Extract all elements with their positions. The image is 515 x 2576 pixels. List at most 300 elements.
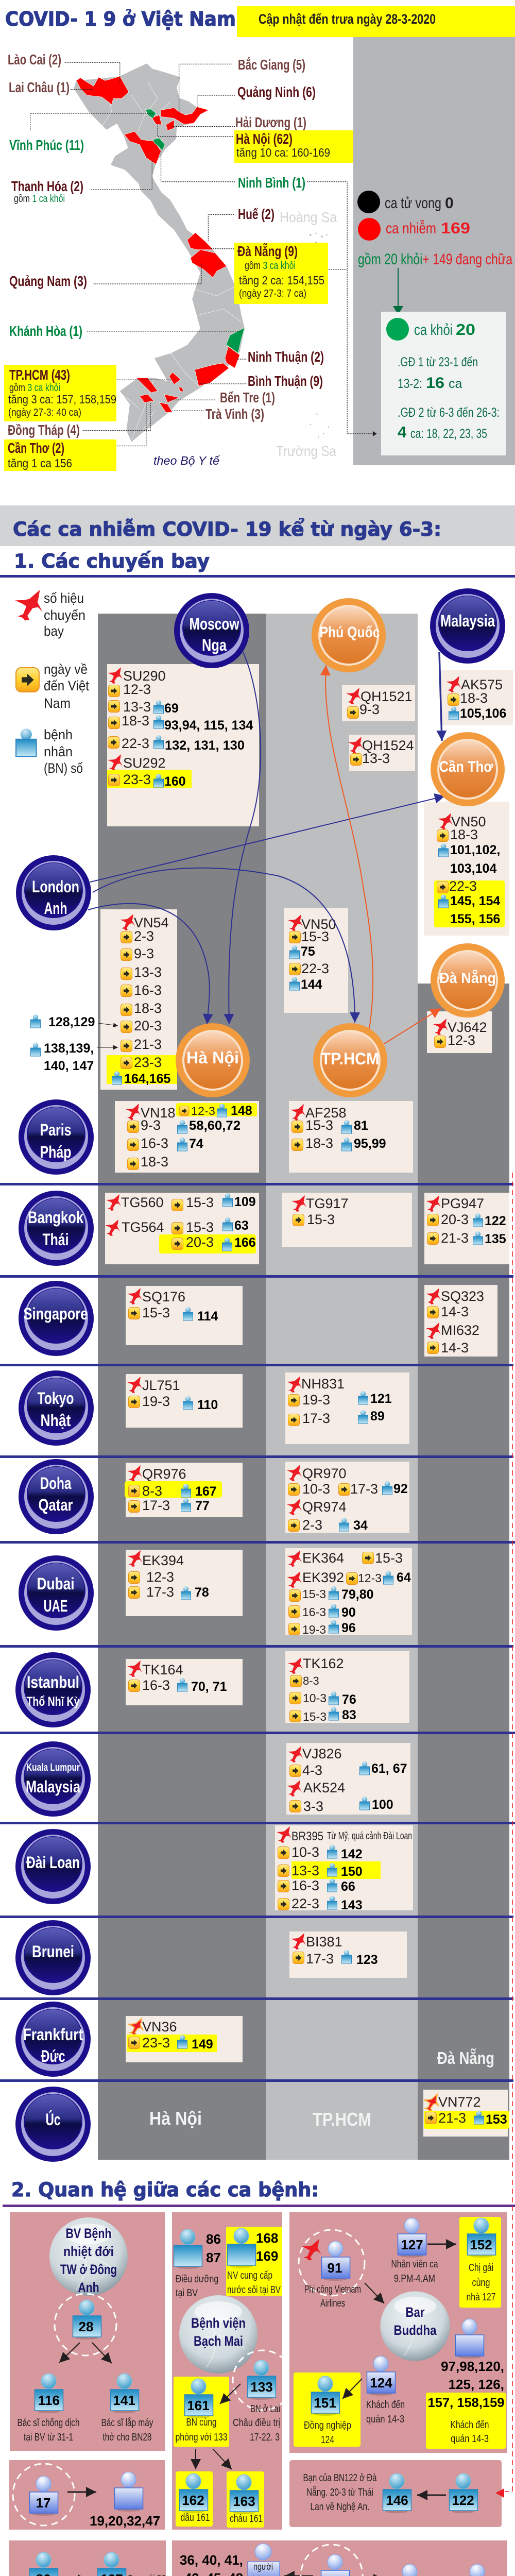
card: JL751: 110 bbox=[197, 1398, 218, 1412]
destination: Đà Nẵng: Đà Nẵng bbox=[439, 969, 496, 987]
card: VJ826 AK524 bbox=[286, 1743, 410, 1815]
card: EK364 EK392: EK364 bbox=[302, 1550, 344, 1566]
callout: TP.HCM bbox=[4, 365, 116, 421]
panel: recovered cases bbox=[381, 312, 506, 455]
card: VJ826 AK524: 100 bbox=[372, 1798, 393, 1812]
card: SQ323 MI632: SQ323 bbox=[441, 1289, 484, 1304]
destination: Cần Thơ bbox=[431, 732, 505, 806]
origin: Moscow: Nga bbox=[202, 636, 227, 654]
patient 133: Châu điều trị bbox=[233, 2417, 280, 2429]
patient 141: Bác sĩ lắp máy bbox=[101, 2417, 153, 2429]
card: EK394: 78 bbox=[195, 1585, 209, 1600]
card: BR395: 66 bbox=[341, 1879, 355, 1894]
flight arrows bbox=[88, 652, 445, 1044]
card: VN50 to Cần Thơ: 22-3 bbox=[449, 878, 477, 894]
provinces with cases bbox=[76, 76, 240, 412]
patient 133: BN ở Lai bbox=[250, 2403, 280, 2415]
patient 17 bbox=[30, 2476, 58, 2516]
callout: TP.HCM: (ngày 27-3: 40 ca) bbox=[8, 407, 81, 418]
origin: London bbox=[16, 855, 91, 930]
origin: Singapore bbox=[19, 1281, 94, 1356]
patient 141 bbox=[101, 2374, 153, 2443]
label: Quảng Nam: Quảng Nam (3) bbox=[9, 273, 87, 289]
sphere: Bạch Mai: Bệnh viện bbox=[191, 2315, 246, 2331]
card: London to Hà Nội VN54: VN54 bbox=[134, 915, 169, 930]
heading: flights: 1. Các chuyến bay bbox=[14, 550, 210, 572]
card: Moscow to Hà Nội flights: 23-3 bbox=[123, 772, 151, 787]
card: VN50 to TP.HCM: 144 bbox=[301, 977, 322, 992]
label: Vĩnh Phúc: Vĩnh Phúc (11) bbox=[9, 137, 84, 153]
patient 116 bbox=[18, 2374, 79, 2443]
card: PG947: 122 bbox=[485, 1214, 506, 1228]
destination: Cần Thơ: Cần Thơ bbox=[439, 758, 493, 775]
card: VN50 to Cần Thơ: 103,104 bbox=[450, 861, 496, 876]
map of Vietnam bbox=[30, 62, 377, 446]
infected legend bbox=[358, 218, 470, 241]
origin: Malaysia: Malaysia bbox=[440, 612, 495, 630]
card: BR395: 16-3 bbox=[291, 1878, 319, 1893]
patients 86 87: Điều dưỡng bbox=[176, 2274, 218, 2285]
card: JL751 bbox=[126, 1374, 243, 1428]
card: PG947: 20-3 bbox=[441, 1212, 469, 1227]
arrow: to recovered box bbox=[393, 268, 403, 315]
card: BR395: 10-3 bbox=[291, 1844, 319, 1860]
patient 44 bbox=[462, 2564, 491, 2576]
patient 124 bbox=[366, 2356, 405, 2425]
card: BR395: 142 bbox=[341, 1847, 363, 1861]
note: patients 138,139,140,147: 140, 147 bbox=[44, 1059, 94, 1073]
legend: plane bbox=[15, 590, 85, 639]
section heading band: Các ca nhiễm COVID- 19 kể từ ngày 6-3: bbox=[13, 518, 441, 540]
callout: Cần Thơ: Cần Thơ (2) bbox=[8, 440, 64, 456]
card: PG947: 21-3 bbox=[441, 1230, 469, 1246]
card: SQ323 MI632: 14-3 bbox=[441, 1304, 469, 1319]
card: NH831: 89 bbox=[370, 1409, 385, 1423]
patient 141: thở cho BN28 bbox=[103, 2432, 151, 2443]
card: Moscow to Hà Nội flights: 132, 131, 130 bbox=[165, 738, 245, 753]
card: AK575: AK575 bbox=[461, 677, 503, 692]
panel: patients 146 and 122: Lan về Nghệ An. bbox=[310, 2501, 370, 2513]
infected legend: ca nhiễm bbox=[386, 220, 436, 237]
origin: Moscow: Moscow bbox=[190, 615, 239, 633]
card: London to Hà Nội VN54: 2-3 bbox=[134, 928, 154, 944]
destination: Đà Nẵng bbox=[431, 943, 505, 1018]
card: VN50 to Cần Thơ: VN50 bbox=[451, 814, 486, 829]
card: AF258: 95,99 bbox=[354, 1137, 386, 1151]
update date banner: Cập nhật đến trưa ngày 28-3-2020 bbox=[259, 11, 436, 27]
card: QH1521: QH1521 bbox=[360, 689, 413, 704]
card: VJ826 AK524: 3-3 bbox=[303, 1799, 323, 1814]
legend: arrival date: ngày về bbox=[44, 662, 88, 677]
patient 151: 151 bbox=[314, 2395, 336, 2411]
origin: Malaysia bbox=[430, 588, 505, 664]
card: TK162: 10-3 bbox=[303, 1691, 327, 1705]
card: TK162: 8-3 bbox=[303, 1674, 319, 1687]
card: SQ323 MI632 bbox=[424, 1285, 497, 1357]
card: TG917: 15-3 bbox=[307, 1212, 335, 1227]
legend: patient bbox=[16, 727, 83, 776]
card: VN50 to Cần Thơ: 18-3 bbox=[450, 827, 478, 842]
card: VN50 to Cần Thơ: 155, 156 bbox=[450, 912, 500, 926]
label: Lào Cai: Lào Cai (2) bbox=[8, 52, 61, 67]
card: EK364 EK392 bbox=[285, 1548, 412, 1636]
callout: Đà Nẵng: gồm 3 ca khỏi bbox=[245, 260, 296, 272]
card: EK364 EK392: 96 bbox=[341, 1621, 356, 1635]
card: VJ826 AK524: 4-3 bbox=[302, 1762, 322, 1778]
patient 116: 116 bbox=[38, 2393, 60, 2408]
callout: Cần Thơ: tăng 1 ca 156 bbox=[8, 456, 72, 470]
patient 122: 122 bbox=[452, 2493, 474, 2508]
card: London to Hà Nội VN54: 13-3 bbox=[134, 964, 162, 980]
origin: Singapore: Singapore bbox=[24, 1304, 88, 1323]
sphere: hospital: TW ở Đông bbox=[60, 2262, 117, 2277]
card: VN18: 9-3 bbox=[141, 1117, 161, 1133]
card: TG560 TG564: TG560 bbox=[121, 1195, 164, 1210]
origin: Kuala Lumpur: Kuala Lumpur bbox=[26, 1762, 80, 1773]
card: TG560 TG564: 15-3 bbox=[186, 1219, 214, 1235]
relatives of 34 bbox=[180, 2544, 280, 2576]
patient 163: cháu 161 bbox=[230, 2513, 263, 2524]
patients 86 87: 86 bbox=[206, 2231, 221, 2247]
card: NH831 bbox=[285, 1372, 409, 1444]
origin: London: London bbox=[32, 877, 79, 896]
patients 168 169: 168 bbox=[256, 2230, 278, 2246]
origin: Tokyo bbox=[19, 1370, 94, 1446]
sphere: Bạch Mai bbox=[179, 2295, 258, 2374]
patient 91: Airlines bbox=[320, 2298, 345, 2309]
label: Thanh Hóa bbox=[11, 178, 83, 205]
label: Hải Dương: Hải Dương (1) bbox=[235, 114, 306, 130]
panel: recovered cases: ca: 18, 22, 23, 35 bbox=[410, 427, 487, 441]
patient 151: 124 bbox=[321, 2434, 334, 2446]
origin: Đài Loan bbox=[15, 1829, 91, 1904]
card: NH831: 121 bbox=[370, 1392, 392, 1406]
card: QR976: 8-3 bbox=[142, 1483, 162, 1499]
label: Trà Vinh: Trà Vinh (3) bbox=[205, 406, 264, 422]
card: VN18: 12-3 bbox=[191, 1105, 215, 1117]
sphere: hospital bbox=[49, 2217, 128, 2296]
note: patients 128,129 bbox=[31, 1014, 118, 1029]
callout: Hà Nội: tăng 10 ca: 160-169 bbox=[236, 146, 330, 159]
card: SQ176: 114 bbox=[197, 1309, 218, 1324]
card: BI381: 17-3 bbox=[306, 1951, 334, 1967]
card: VN18: 16-3 bbox=[141, 1136, 168, 1151]
relatives of 34: người bbox=[253, 2562, 273, 2572]
origin: Brunei: Brunei bbox=[32, 1942, 74, 1961]
sphere: Bar Buddha: Buddha bbox=[393, 2323, 437, 2338]
card: QH1524 bbox=[348, 735, 415, 771]
legend: arrival date: Nam bbox=[44, 696, 71, 711]
card: TK164 bbox=[126, 1659, 243, 1705]
card: QR970 QR974: QR974 bbox=[302, 1499, 347, 1515]
patient 124: 124 bbox=[370, 2375, 392, 2391]
card: BR395: BR395 bbox=[291, 1829, 323, 1843]
patients 86 87 bbox=[174, 2229, 221, 2299]
sphere: hospital: nhiệt đới bbox=[63, 2244, 114, 2259]
origin: Paris: Paris bbox=[40, 1121, 71, 1139]
card: TG560 TG564: 63 bbox=[234, 1218, 249, 1233]
origin: Doha bbox=[19, 1459, 94, 1534]
origin: Úc bbox=[15, 2087, 91, 2162]
card: AF258: AF258 bbox=[305, 1105, 347, 1121]
patient 127: Nhân viên ca bbox=[391, 2259, 438, 2270]
patient 152 bbox=[459, 2217, 501, 2308]
bar customers: 125, 126, bbox=[449, 2377, 504, 2392]
card: TK162: 76 bbox=[342, 1692, 356, 1707]
destination: Hà Nội: Hà Nội bbox=[186, 1048, 239, 1067]
destination: Phú Quốc bbox=[312, 598, 386, 672]
patient 133: 17-22. 3 bbox=[250, 2432, 280, 2443]
patient 127 bbox=[391, 2218, 438, 2284]
card: TG560 TG564: TG564 bbox=[122, 1219, 164, 1235]
panel: patient 17 cluster bbox=[9, 2460, 165, 2530]
panel: recovered cases: 13-2: bbox=[398, 377, 422, 391]
card: Moscow to Hà Nội flights: SU290 bbox=[123, 668, 166, 684]
card: TG560 TG564: 166 bbox=[234, 1235, 256, 1250]
new bar customers: 157, 158,159 bbox=[427, 2396, 505, 2410]
deaths legend bbox=[357, 191, 454, 213]
relatives of 34: 36, 40, 41, bbox=[180, 2552, 243, 2568]
origin: Istanbul: Thổ Nhĩ Kỳ bbox=[27, 1694, 80, 1709]
card: BI381: BI381 bbox=[306, 1934, 342, 1950]
card: London to Hà Nội VN54 bbox=[100, 909, 177, 1090]
card: VN18: 148 bbox=[231, 1104, 252, 1118]
card: VJ826 AK524: VJ826 bbox=[302, 1746, 342, 1761]
card: AF258: 15-3 bbox=[305, 1117, 333, 1133]
card: QH1521 bbox=[342, 685, 415, 721]
card: BR395: 143 bbox=[341, 1898, 363, 1912]
patient 152: 152 bbox=[470, 2237, 492, 2252]
label: Khánh Hòa: Khánh Hòa (1) bbox=[9, 323, 82, 339]
patient 151: Đồng nghiệp bbox=[304, 2420, 351, 2431]
card: EK394: 17-3 bbox=[146, 1584, 174, 1600]
label: Thanh Hóa: gồm 1 ca khỏi bbox=[14, 193, 65, 205]
origin: Brunei bbox=[15, 1920, 91, 1995]
patient 116: tại BV từ 31-1 bbox=[24, 2432, 73, 2443]
panel: national totals bbox=[353, 37, 515, 465]
callout: Đà Nẵng: (ngày 27-3: 7 ca) bbox=[239, 288, 306, 299]
sphere: Bar Buddha: Bar bbox=[406, 2304, 425, 2320]
card: London to Hà Nội VN54: 18-3 bbox=[134, 1001, 162, 1016]
card: AF258: 81 bbox=[354, 1118, 368, 1133]
legend: patient: (BN) số bbox=[44, 760, 83, 776]
patient 28 bbox=[73, 2300, 101, 2340]
legend: plane: chuyến bbox=[44, 607, 85, 623]
callout: TP.HCM: TP.HCM (43) bbox=[9, 367, 70, 383]
card: EK364 EK392: 15-3 bbox=[375, 1550, 403, 1566]
card: VN36: 149 bbox=[192, 2037, 213, 2052]
sphere: Bạch Mai: Bạch Mai bbox=[194, 2333, 243, 2349]
callout: Đà Nẵng: Đà Nẵng (9) bbox=[237, 243, 298, 259]
destination: Phú Quốc: Phú Quốc bbox=[319, 624, 380, 641]
card: TK162: 83 bbox=[342, 1708, 356, 1722]
card: QR970 QR974: 92 bbox=[393, 1482, 408, 1496]
card: VN36: VN36 bbox=[142, 2019, 177, 2035]
card: TK164: 70, 71 bbox=[191, 1680, 227, 1694]
card: TK162: 15-3 bbox=[303, 1710, 327, 1723]
card: VN772: 21-3 bbox=[438, 2110, 466, 2126]
callout: Cần Thơ bbox=[4, 439, 116, 471]
origin: Istanbul bbox=[15, 1652, 91, 1727]
card: NH831: 19-3 bbox=[302, 1392, 330, 1408]
card: VN50 to TP.HCM bbox=[284, 908, 348, 1013]
callout: TP.HCM: tăng 3 ca: 157, 158,159 bbox=[8, 393, 116, 406]
card: QR976: 17-3 bbox=[142, 1498, 170, 1513]
card: London to Hà Nội VN54: 164,165 bbox=[124, 1072, 170, 1086]
patient 152: nhà 127 bbox=[467, 2292, 495, 2303]
card: SQ176: 15-3 bbox=[142, 1305, 170, 1320]
patients 168 169: 169 bbox=[256, 2248, 278, 2264]
card: BR395: 150 bbox=[341, 1865, 363, 1879]
label: Hoàng Sa: Hoàng Sa bbox=[280, 209, 337, 225]
bar customers: 97,98,120, bbox=[441, 2359, 504, 2374]
patients 19,20,32,47 bbox=[90, 2472, 160, 2529]
origin: Moscow bbox=[174, 593, 249, 668]
legend: patient: bệnh bbox=[44, 727, 73, 742]
label: Lai Châu: Lai Châu (1) bbox=[9, 79, 70, 95]
patients 19,20,32,47: 19,20,32,47 bbox=[90, 2513, 160, 2529]
origin: Frankfurt: Đức bbox=[41, 2047, 65, 2065]
patient 161: phòng với 133 bbox=[175, 2432, 228, 2443]
callout: Đà Nẵng: tăng 2 ca: 154,155 bbox=[239, 274, 324, 287]
card: QR976: 167 bbox=[195, 1484, 217, 1499]
card: EK364 EK392: EK392 bbox=[302, 1570, 344, 1585]
patient 122 bbox=[449, 2473, 478, 2513]
origin: Istanbul: Istanbul bbox=[27, 1673, 79, 1691]
label: Ninh Bình: Ninh Bình (1) bbox=[238, 175, 305, 191]
origin: Frankfurt: Frankfurt bbox=[23, 2025, 83, 2044]
deaths legend: ca tử vong bbox=[385, 195, 441, 212]
card: QH1524: QH1524 bbox=[362, 738, 414, 753]
origin: Dubai: Dubai bbox=[37, 1574, 74, 1593]
destination: TP.HCM bbox=[313, 1023, 387, 1097]
column label: Đà Nẵng: Đà Nẵng bbox=[437, 2048, 494, 2067]
card: EK364 EK392: 19-3 bbox=[302, 1623, 326, 1636]
destination columns bbox=[98, 614, 509, 2160]
patient 127: 127 bbox=[401, 2237, 423, 2252]
card: EK394: 12-3 bbox=[146, 1569, 174, 1585]
panel: patients 146 and 122 bbox=[289, 2460, 502, 2527]
card: VN50 to Cần Thơ bbox=[424, 802, 509, 936]
leader lines bbox=[30, 62, 374, 446]
recovered provinces bbox=[146, 109, 245, 353]
origin: Tokyo: Nhật bbox=[40, 1411, 71, 1430]
origin: Úc: Úc bbox=[45, 2110, 61, 2129]
card: TG560 TG564 bbox=[105, 1193, 259, 1264]
origin: Dubai: UAE bbox=[43, 1597, 68, 1615]
panel: Bạch Mai hospital cluster bbox=[172, 2212, 293, 2530]
patients 86 87: tại BV bbox=[176, 2287, 198, 2299]
card: TG560 TG564: 15-3 bbox=[186, 1195, 214, 1210]
patient 91: 91 bbox=[328, 2260, 342, 2276]
panel: patients 146 and 122: Nẵng. 20-3 từ Thái bbox=[306, 2486, 373, 2498]
card: Moscow to Hà Nội flights: 69 bbox=[164, 701, 179, 716]
legend: arrival date bbox=[16, 662, 89, 711]
card: London to Hà Nội VN54: 21-3 bbox=[134, 1037, 162, 1052]
patient 163 bbox=[227, 2471, 264, 2528]
card: VN36: 23-3 bbox=[142, 2035, 170, 2050]
label: Thanh Hóa: Thanh Hóa (2) bbox=[11, 178, 83, 194]
islands bbox=[310, 233, 329, 438]
card: Moscow to Hà Nội flights: 13-3 bbox=[123, 699, 151, 715]
panel: recovered cases: 20 bbox=[456, 320, 475, 338]
card: PG947 bbox=[424, 1193, 509, 1264]
card: VJ642: 12-3 bbox=[448, 1032, 475, 1048]
infected legend: 169 bbox=[441, 219, 470, 237]
new bar customers: Khách đến bbox=[450, 2419, 489, 2431]
label: Bắc Giang: Bắc Giang (5) bbox=[238, 57, 305, 73]
patient 116: Bác sĩ chống dịch bbox=[18, 2417, 79, 2429]
patient 127: 9.PM-4.AM bbox=[394, 2273, 435, 2284]
card: EK364 EK392: 16-3 bbox=[302, 1605, 326, 1619]
origin: Bangkok bbox=[19, 1191, 94, 1266]
panel: Bar Buddha cluster bbox=[289, 2212, 507, 2453]
legend: patient: nhân bbox=[44, 744, 73, 759]
callout: Hà Nội: Hà Nội (62) bbox=[236, 131, 293, 147]
card: AF258 bbox=[289, 1101, 413, 1173]
card: PG947: 135 bbox=[485, 1232, 506, 1246]
origin: Frankfurt bbox=[15, 2002, 91, 2077]
legend: plane: số hiệu bbox=[44, 590, 84, 606]
panel: recovered cases: ca khỏi bbox=[414, 321, 453, 338]
card: SQ176 bbox=[126, 1286, 243, 1345]
source note: theo Bộ Y tế bbox=[153, 454, 220, 467]
card: AK575 bbox=[441, 670, 513, 725]
patient 163: 163 bbox=[233, 2494, 255, 2509]
patient 146 bbox=[383, 2473, 411, 2513]
callout: TP.HCM: gồm 3 ca khỏi bbox=[9, 382, 60, 394]
patient 91 bbox=[302, 2239, 361, 2309]
card: VN50 to TP.HCM: 75 bbox=[301, 944, 315, 959]
legend: arrival date: đến Việt bbox=[44, 678, 89, 693]
destination: Hà Nội bbox=[176, 1023, 250, 1097]
patients 168 169 bbox=[226, 2227, 282, 2296]
card: TG917: TG917 bbox=[306, 1196, 349, 1211]
card: PG947: PG947 bbox=[441, 1196, 484, 1211]
origin: Kuala Lumpur bbox=[15, 1741, 91, 1817]
card: JL751: JL751 bbox=[142, 1378, 180, 1393]
card: TK162: TK162 bbox=[303, 1656, 344, 1671]
card: QR970 QR974: 2-3 bbox=[302, 1517, 322, 1533]
card: EK364 EK392: 79,80 bbox=[341, 1587, 374, 1602]
arrow: dashed link from PG947 to patient 122 bbox=[495, 1173, 512, 2498]
patient 162 bbox=[176, 2471, 213, 2527]
panel: recovered cases: 4 bbox=[398, 423, 407, 441]
card: TK162 bbox=[285, 1651, 409, 1723]
card: BR395: Từ Mỹ, quá cảnh Đài Loan bbox=[327, 1831, 412, 1842]
card: QR976 bbox=[125, 1463, 243, 1517]
origin: Dubai bbox=[19, 1555, 94, 1631]
patients 86 87: 87 bbox=[206, 2250, 221, 2265]
card: VN18: 58,60,72 bbox=[189, 1118, 241, 1133]
panel: patient 34 cluster bbox=[172, 2540, 507, 2576]
card: VJ642: VJ642 bbox=[448, 1020, 487, 1035]
card: VN36 bbox=[126, 2016, 243, 2062]
card: Moscow to Hà Nội flights: SU292 bbox=[123, 755, 166, 771]
origin: Paris bbox=[19, 1099, 94, 1175]
label: Huế: Huế (2) bbox=[238, 206, 274, 222]
card: VN18: VN18 bbox=[141, 1105, 176, 1121]
label: Đồng Tháp: Đồng Tháp (4) bbox=[8, 422, 80, 438]
patient 133 bbox=[233, 2360, 280, 2443]
patient 37 bbox=[387, 2564, 435, 2576]
card: NH831: 17-3 bbox=[302, 1411, 330, 1426]
card: QR976: QR976 bbox=[142, 1466, 186, 1482]
note: patients 138,139,140,147 bbox=[31, 1041, 118, 1073]
card: VN18: 74 bbox=[189, 1137, 203, 1151]
panel: recovered cases: 16 bbox=[426, 375, 444, 392]
card: VN18 bbox=[115, 1101, 259, 1173]
